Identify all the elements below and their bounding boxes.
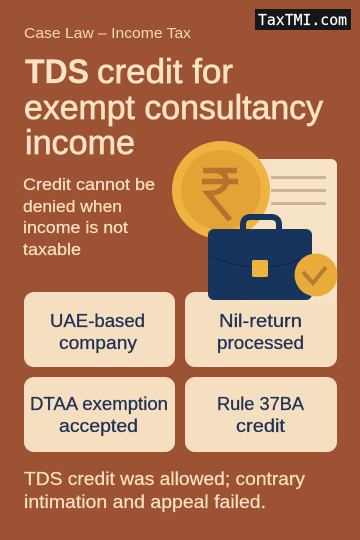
- icon: check badge: [294, 254, 338, 296]
- card: UAE-based company: company: [59, 332, 138, 353]
- card: UAE-based company: UAE-based: [50, 310, 145, 331]
- card: DTAA exemption accepted: DTAA exemption: [30, 393, 168, 414]
- subtitle: Credit cannot be: [23, 175, 155, 194]
- icon: briefcase: [208, 217, 312, 300]
- category label: Case Law – Income Tax: [24, 25, 192, 42]
- card: UAE-based company: [24, 292, 175, 367]
- icon: rupee coin: [172, 141, 270, 239]
- watermark logo: TaxTMI.com: [258, 12, 347, 29]
- card: Nil-return processed: [185, 292, 337, 367]
- subtitle: [23, 175, 155, 259]
- title: credit for: [97, 53, 233, 91]
- card: Rule 37BA credit: credit: [236, 415, 285, 436]
- illustration: coin, document, briefcase: [172, 141, 338, 304]
- conclusion text: [24, 469, 305, 512]
- card: Rule 37BA credit: Rule 37BA: [217, 393, 305, 414]
- subtitle: denied when: [23, 197, 122, 216]
- title: exempt consultancy: [24, 89, 323, 127]
- subtitle: taxable: [23, 240, 81, 259]
- title: income: [25, 124, 135, 162]
- conclusion text: intimation and appeal failed.: [24, 492, 266, 512]
- title: TDS: [25, 53, 89, 91]
- icon: document: [240, 159, 337, 304]
- card: Nil-return processed: processed: [217, 332, 304, 353]
- card: Rule 37BA credit: [185, 377, 337, 452]
- card: DTAA exemption accepted: accepted: [59, 415, 138, 436]
- subtitle: income is not: [23, 218, 128, 237]
- conclusion text: TDS credit was allowed; contrary: [24, 469, 305, 489]
- card: DTAA exemption accepted: [24, 377, 175, 452]
- card: Nil-return processed: Nil-return: [219, 310, 302, 331]
- title: [24, 53, 323, 162]
